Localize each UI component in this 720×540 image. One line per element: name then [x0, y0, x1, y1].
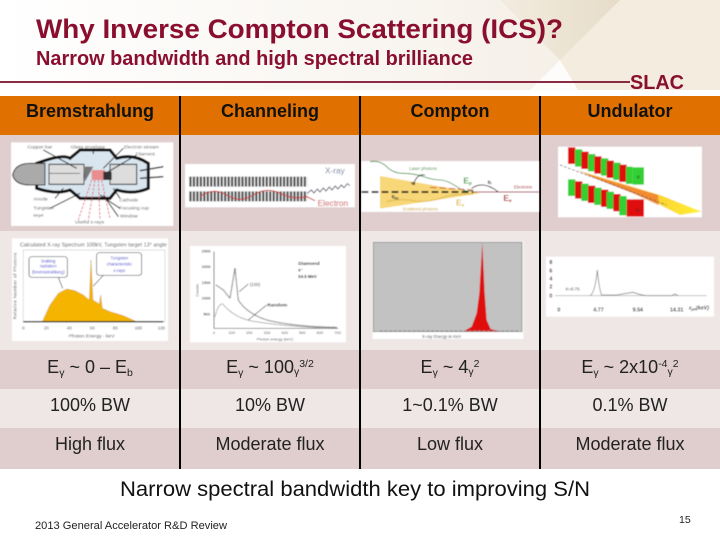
chart: compton spectrum: X-ray Energy in KeV [422, 334, 461, 339]
page number: 15 [679, 514, 691, 526]
chart: bremsstrahlung spectrum: characteristic [107, 261, 133, 266]
diagram: compton scattering: Laser photons [409, 166, 437, 171]
column separators [180, 96, 540, 469]
chart: channeling spectrum: 200 [246, 330, 253, 335]
chart: undulator spectrum: 0 [557, 307, 560, 313]
diagram: x-ray tube: Copper bar [27, 145, 53, 151]
diagram: x-ray tube: Cathode [119, 197, 138, 203]
row: energy scaling: E [226, 357, 238, 377]
diagram: compton scattering: e [509, 198, 512, 204]
diagram: compton scattering: p [469, 180, 472, 186]
row: energy scaling: γ [668, 366, 674, 378]
chart: channeling spectrum: 600 [317, 330, 324, 335]
chart: channeling spectrum: 100 [228, 330, 236, 335]
subtitle: Narrow bandwidth and high spectral brilliance [36, 48, 473, 70]
row: energy scaling: ~ 100 [243, 357, 294, 377]
row: energy scaling: γ [468, 366, 474, 378]
column headings: Bremstrahlung [26, 101, 154, 121]
diagram: compton scattering: s [462, 202, 465, 208]
key takeaway: Narrow spectral bandwidth key to improving S/N [120, 477, 590, 501]
chart: undulator spectrum: 4 [549, 277, 552, 283]
chart: channeling spectrum: 400 [281, 330, 289, 335]
diagram: x-ray tube: Filament [136, 151, 155, 157]
diagram: undulator [558, 147, 702, 217]
row: energy scaling: γ [238, 367, 244, 379]
chart: bremsstrahlung spectrum: 40 [67, 325, 72, 330]
chart: bremsstrahlung spectrum: 80 [113, 325, 118, 330]
comparison table [0, 96, 720, 469]
title: Why Inverse Compton Scattering (ICS)? [36, 14, 563, 44]
chart: bremsstrahlung spectrum: 120 [158, 325, 166, 330]
row: source schematics background [0, 135, 720, 231]
diagram: compton scattering: E [463, 175, 469, 185]
chart: channeling spectrum: 1500 [202, 280, 211, 285]
diagram: compton scattering: f/e [394, 196, 399, 200]
row: flux: Low flux [417, 434, 483, 454]
diagram: x-ray tube: Tungsten [33, 205, 54, 211]
row: flux [55, 434, 685, 454]
row: energy scaling: E [581, 357, 593, 377]
chart: channeling spectrum: Counts [195, 284, 200, 297]
chart: channeling spectrum: Random [267, 303, 288, 309]
diagram: x-ray tube: Anode [33, 197, 48, 203]
chart: undulator spectrum: K=0.75 [566, 287, 580, 292]
diagram: compton scattering: Electrons [514, 184, 532, 189]
chart: channeling spectrum: 0 [213, 330, 216, 335]
diagram: compton scattering: θ [392, 195, 394, 201]
chart: channeling spectrum [190, 246, 346, 342]
row: energy scaling: ~ 0 – E [64, 357, 127, 377]
chart: bremsstrahlung spectrum [12, 238, 168, 341]
chart: channeling spectrum: 2000 [202, 264, 211, 269]
chart: compton spectrum [373, 242, 523, 339]
chart: bremsstrahlung spectrum: 0 [22, 325, 25, 330]
row: energy scaling: E [47, 357, 59, 377]
column headings [26, 101, 672, 121]
row: spectra background [0, 231, 720, 350]
chart: channeling spectrum: 1000 [202, 295, 211, 300]
row: energy scaling: γ [59, 367, 65, 379]
row: bandwidth: 100% BW [50, 395, 130, 415]
diagram: x-ray tube: Window [120, 213, 138, 219]
row: flux: Moderate flux [215, 434, 325, 454]
SLAC logo: SLAC [630, 72, 684, 94]
chart: channeling spectrum: Diamond [298, 261, 320, 267]
row: energy scaling: ~ 4 [438, 357, 468, 377]
chart: bremsstrahlung spectrum: 60 [90, 325, 95, 330]
diagram: x-ray tube: Focusing cup [119, 205, 149, 211]
diagram: channeling: X-ray [325, 165, 346, 175]
chart: undulator spectrum: ε [689, 305, 692, 311]
header rule [0, 81, 630, 83]
row: energy scaling: ~ 2x10 [599, 357, 658, 377]
diagram: undulator: N [636, 208, 639, 213]
chart: bremsstrahlung spectrum: (bremsstrahlung) [32, 269, 65, 274]
table header band [0, 96, 720, 135]
diagram: x-ray tube: Electron stream [124, 145, 159, 151]
diagram: compton scattering: i [490, 182, 491, 186]
chart: bremsstrahlung spectrum: Photon Energy - keV [69, 333, 115, 339]
row: energy scaling: 2 [474, 358, 480, 370]
footer label: 2013 General Accelerator R&D Review [35, 520, 227, 532]
chart: bremsstrahlung spectrum: 100 [135, 325, 143, 330]
diagram: channeling: Electron [318, 198, 349, 208]
column headings: Compton [411, 101, 489, 121]
row: flux background [0, 428, 720, 469]
diagram: compton scattering: Scattered photons [403, 207, 438, 212]
chart: channeling spectrum: 54.5 MeV [298, 274, 317, 279]
chart: channeling spectrum: 700 [334, 330, 342, 335]
chart: undulator spectrum: 14.31 [670, 307, 683, 313]
row: energy scaling: γ [433, 367, 439, 379]
diagram: compton scattering: i [414, 182, 415, 186]
diagram: undulator: S [637, 174, 640, 179]
diagram: x-ray tube [11, 142, 173, 226]
chart: undulator spectrum: 4.77 [593, 307, 604, 313]
row: energy scaling: γ [294, 366, 300, 378]
chart: bremsstrahlung spectrum: 20 [44, 325, 49, 330]
chart: channeling spectrum: 500 [299, 330, 306, 335]
column headings: Channeling [221, 101, 319, 121]
chart: bremsstrahlung spectrum: braking [41, 258, 56, 263]
diagram: compton scattering: θ [488, 180, 490, 186]
row: energy scaling [47, 357, 679, 379]
row: energy scaling: 2 [673, 358, 679, 370]
diagram: compton scattering [362, 161, 539, 212]
diagram: compton scattering: α [411, 180, 414, 186]
chart: channeling spectrum: 2500 [202, 249, 211, 254]
chart: channeling spectrum: 500 [203, 311, 211, 316]
header background [0, 0, 720, 90]
row: energy scaling: b [127, 367, 133, 379]
chart: undulator spectrum: 9.54 [633, 307, 643, 313]
chart: channeling spectrum: 300 [264, 330, 271, 335]
chart: undulator spectrum: 6 [549, 269, 552, 275]
chart: undulator spectrum: ph [691, 307, 697, 311]
chart: bremsstrahlung spectrum: radiation [40, 263, 57, 268]
chart: channeling spectrum: Photon energy (keV) [257, 337, 294, 342]
chart: undulator spectrum: 2 [549, 285, 552, 291]
row: bandwidth: 10% BW [235, 395, 305, 415]
chart: undulator spectrum: 0 [549, 293, 552, 299]
diagram: channeling [185, 164, 355, 208]
chart: bremsstrahlung spectrum: x-rays [113, 268, 125, 273]
diagram: compton scattering: E [456, 197, 462, 207]
row: flux: High flux [55, 434, 125, 454]
column headings: Undulator [588, 101, 672, 121]
row: energy scaling: E [421, 357, 433, 377]
chart: undulator spectrum: 8 [549, 260, 552, 266]
diagram: x-ray tube: Glass envelope [71, 145, 105, 151]
chart: bremsstrahlung spectrum: Tungsten [110, 255, 129, 260]
row: bandwidth [50, 395, 668, 415]
row: energy scaling: 3/2 [299, 358, 314, 370]
diagram: x-ray tube: target [33, 213, 44, 218]
row: bandwidth: 1~0.1% BW [402, 395, 498, 415]
chart: bremsstrahlung spectrum: Calculated X-ray Spectrum 100kV, Tungsten target 13° angle [20, 243, 167, 249]
row: energy scaling: -4 [658, 358, 668, 370]
row: energy scaling: γ [593, 367, 599, 379]
row: energy background [0, 350, 720, 389]
row: bandwidth background [0, 389, 720, 428]
chart: bremsstrahlung spectrum: Relative Number of Photons [13, 252, 18, 319]
row: flux: Moderate flux [575, 434, 685, 454]
row: bandwidth: 0.1% BW [592, 395, 668, 415]
chart: channeling spectrum: e⁻ [298, 268, 303, 273]
diagram: x-ray tube: Useful x-rays [75, 219, 105, 225]
chart: undulator spectrum: (keV) [696, 305, 709, 311]
diagram: compton scattering: E [503, 193, 509, 203]
chart: channeling spectrum: (100) [250, 282, 261, 287]
chart: undulator spectrum [546, 257, 714, 317]
